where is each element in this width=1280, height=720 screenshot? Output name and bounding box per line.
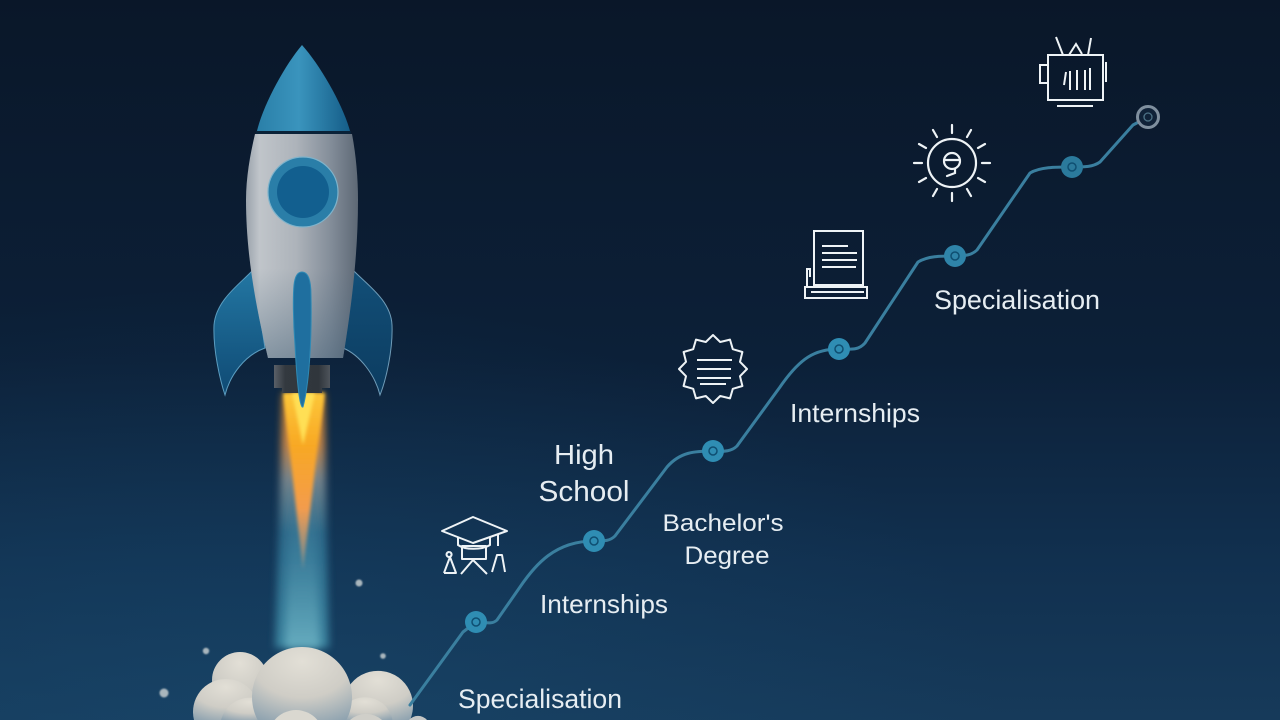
label: High School	[538, 439, 630, 508]
rocket	[214, 45, 392, 407]
label: Internships lower: Internships	[540, 589, 668, 619]
label: Bachelor's Degree: Bachelor's	[662, 510, 784, 537]
label: High School: School	[538, 476, 630, 508]
label: Specialisation lower: Specialisation	[458, 684, 622, 714]
icon: document on ruler	[805, 231, 867, 298]
label: Specialisation upper: Specialisation	[934, 285, 1100, 315]
right fin	[343, 270, 392, 395]
icon: sun with face	[914, 125, 990, 201]
rocket body	[246, 134, 358, 358]
label: Bachelor's Degree: Degree	[684, 542, 770, 570]
label: Bachelor's Degree	[662, 510, 784, 570]
floating particles	[160, 580, 386, 698]
label: Internships upper: Internships	[790, 398, 920, 428]
icon: graduation cap	[442, 517, 507, 574]
milestone nodes	[465, 106, 1158, 633]
rocket exhaust flame	[275, 393, 329, 648]
label: High School: High	[554, 439, 614, 470]
nose band	[256, 131, 351, 134]
career path line	[410, 117, 1148, 705]
nose cone	[257, 45, 350, 131]
icon: chart board	[1040, 37, 1106, 106]
launch smoke cloud	[193, 647, 427, 720]
centre fin	[293, 272, 311, 407]
icon: badge with lines	[679, 335, 747, 403]
engine nozzle	[274, 365, 330, 393]
porthole window	[268, 157, 338, 227]
left fin	[214, 270, 265, 395]
